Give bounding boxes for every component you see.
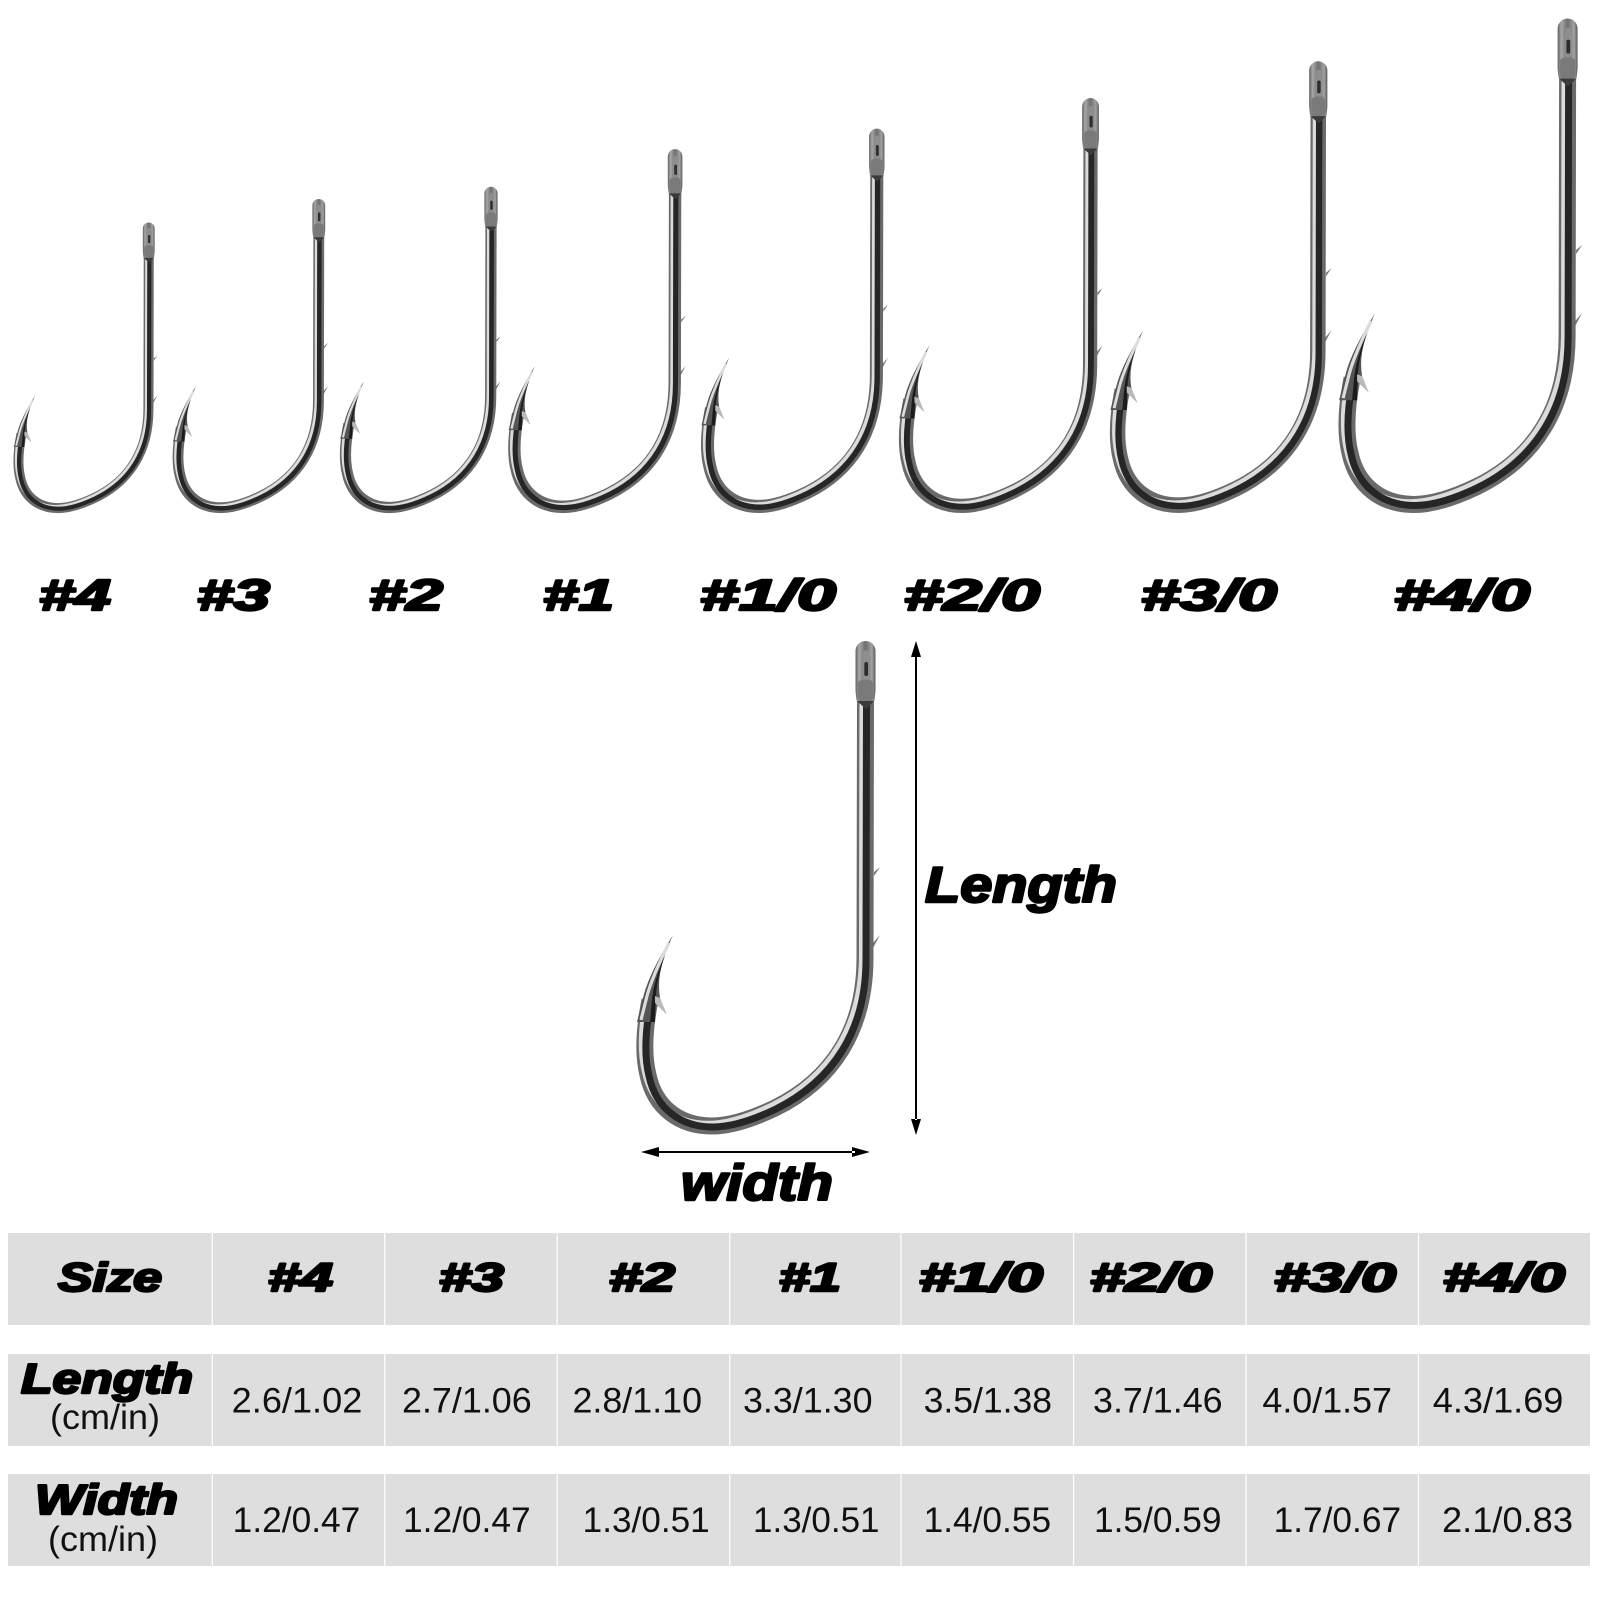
- row: width: 1.2/0.47: [403, 1501, 531, 1540]
- row: length: 2.8/1.10: [572, 1382, 702, 1420]
- row: sizes: #4: [268, 1256, 333, 1300]
- arrow: length: [911, 641, 921, 1135]
- hook: #3: [173, 199, 328, 508]
- row: sizes: #1/0: [919, 1256, 1043, 1300]
- row: width: 1.3/0.51: [583, 1501, 710, 1540]
- label: #1: #1: [543, 571, 614, 620]
- row: length: (cm/in): [50, 1398, 160, 1437]
- hook: #3/0: [1110, 61, 1331, 506]
- row: sizes: #4/0: [1443, 1256, 1565, 1300]
- row: length: 3.5/1.38: [924, 1382, 1052, 1420]
- row: length: 3.7/1.46: [1093, 1382, 1223, 1420]
- row: width: 1.7/0.67: [1274, 1501, 1401, 1540]
- row: length: 2.7/1.06: [402, 1382, 532, 1420]
- row: sizes: Size: [58, 1256, 162, 1300]
- row: length: 2.6/1.02: [232, 1382, 362, 1420]
- hook: #4: [14, 223, 157, 509]
- row: width: 2.1/0.83: [1442, 1501, 1573, 1540]
- row: length: 4.0/1.57: [1262, 1382, 1392, 1420]
- row: sizes: #3: [439, 1256, 504, 1300]
- row: length: 4.3/1.69: [1433, 1382, 1563, 1420]
- row: width: 1.2/0.47: [233, 1501, 360, 1540]
- label: #3: #3: [197, 571, 270, 620]
- label: #3/0: #3/0: [1141, 571, 1278, 620]
- label: #1/0: #1/0: [700, 571, 837, 620]
- label: #2/0: #2/0: [904, 571, 1041, 620]
- row: width: 1.5/0.59: [1094, 1501, 1222, 1540]
- arrow: width: [641, 1147, 870, 1157]
- hook: #1/0: [701, 129, 888, 507]
- row: width: 1.4/0.55: [924, 1501, 1051, 1540]
- heading: width: width: [681, 1155, 833, 1211]
- row: sizes: [8, 1233, 1590, 1325]
- row: sizes: #3/0: [1274, 1256, 1396, 1300]
- row: length: 3.3/1.30: [743, 1382, 872, 1420]
- row: width: Width: [35, 1476, 178, 1523]
- label: #2: #2: [369, 571, 444, 620]
- hook: #4/0: [1339, 19, 1582, 505]
- row: width: [8, 1474, 1590, 1566]
- heading: Length: Length: [925, 857, 1117, 913]
- label: #4: #4: [39, 571, 111, 620]
- row: width: 1.3/0.51: [753, 1501, 880, 1540]
- row: length: Length: [21, 1355, 193, 1402]
- row: sizes: #2/0: [1090, 1256, 1212, 1300]
- row: length: [8, 1354, 1590, 1446]
- size labels row: [39, 571, 1531, 620]
- hook: #2/0: [899, 98, 1103, 507]
- large reference hook: [637, 641, 880, 1127]
- hook: #2: [340, 187, 501, 508]
- hook: #1: [509, 149, 686, 508]
- row: sizes: #2: [609, 1256, 675, 1300]
- label: #4/0: #4/0: [1394, 571, 1531, 620]
- size table: [8, 1233, 1590, 1566]
- row: width: (cm/in): [48, 1520, 158, 1559]
- row: sizes: #1: [779, 1256, 841, 1300]
